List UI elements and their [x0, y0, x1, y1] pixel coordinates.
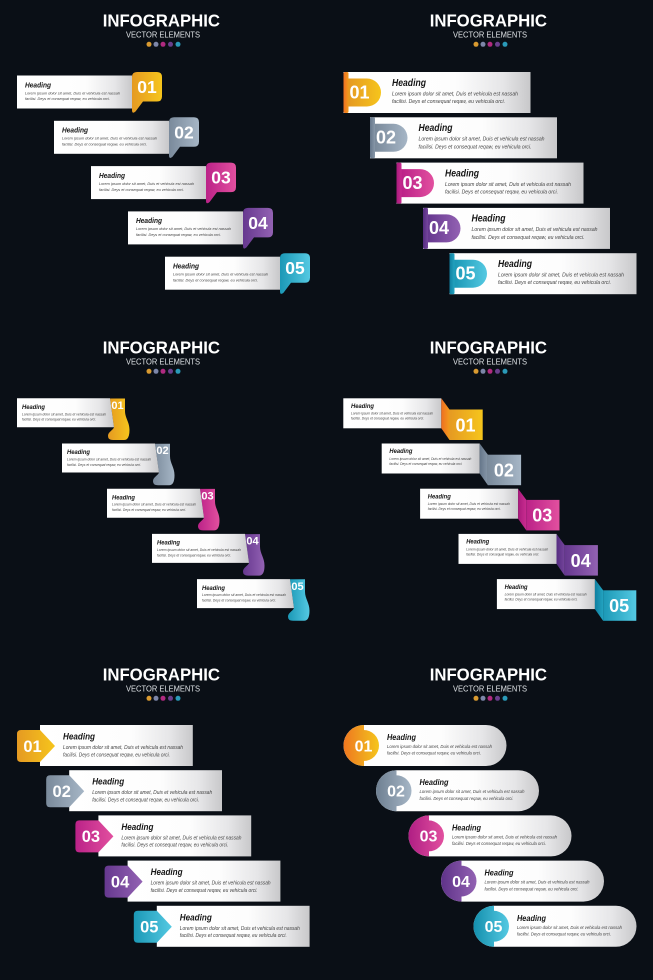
step 04	[128, 208, 273, 249]
step 02: facilisi. Deys et consequat reqaw, eu vehicula orci.	[389, 462, 462, 466]
step 01	[343, 398, 483, 440]
step 03: Heading	[121, 822, 154, 833]
step 02: facilisi. Deys et consequat reqaw, eu vehicula orci.	[420, 796, 514, 801]
panel: speech bubble steps	[17, 11, 310, 294]
step 05: facilisi. Deys et consequat reqaw, eu vehicula orci.	[180, 933, 287, 939]
step 01: facilisi. Deys et consequat reqaw, eu vehicula orci.	[351, 417, 424, 421]
step 04: Heading	[151, 867, 183, 878]
step 01: facilisi. Deys et consequat reqaw, eu vehicula orci.	[392, 99, 505, 105]
step 01: Lorem ipsum dolor sit amet, Duis et vehicula est nassah	[387, 744, 493, 749]
title block	[103, 665, 220, 701]
step 01: Heading	[351, 403, 375, 410]
step 03: Lorem ipsum dolor sit amet, Duis et vehicula est nassah	[445, 182, 571, 188]
step 02: 02	[53, 783, 71, 801]
title block	[430, 11, 547, 47]
step 04: 04	[429, 218, 449, 238]
step 02: 02	[156, 445, 169, 457]
step 02: Heading	[389, 448, 413, 455]
step 03	[75, 815, 251, 856]
step 02	[370, 117, 557, 158]
step 04: 04	[571, 551, 591, 571]
step 04: facilisi. Deys et consequat reqaw, eu vehicula orci.	[136, 232, 221, 237]
title block: INFOGRAPHIC	[430, 665, 547, 685]
step 05: Lorem ipsum dolor sit amet, Duis et vehicula est nassah	[505, 593, 587, 597]
step 03: Lorem ipsum dolor sit amet, Duis et vehicula est nassah	[99, 181, 194, 186]
step 01: Lorem ipsum dolor sit amet, Duis et vehicula est nassah	[63, 745, 183, 751]
step 04: Lorem ipsum dolor sit amet, Duis et vehicula est nassah	[151, 881, 271, 887]
step 02: Lorem ipsum dolor sit amet, Duis et vehicula est nassah	[62, 136, 157, 141]
step 03	[107, 489, 220, 530]
step 05: 05	[485, 919, 502, 936]
step 02	[62, 444, 174, 485]
step 04	[458, 534, 598, 576]
step 03	[408, 815, 572, 856]
title block	[103, 11, 220, 47]
step 03: facilisi. Deys et consequat reqaw, eu vehicula orci.	[452, 841, 546, 846]
step 01: 01	[23, 738, 42, 756]
step 01	[344, 72, 530, 113]
step 03: 03	[402, 173, 423, 193]
step 03: facilisi. Deys et consequat reqaw, eu vehicula orci.	[445, 190, 558, 196]
step 05: Lorem ipsum dolor sit amet, Duis et vehicula est nassah	[173, 272, 268, 276]
step 01	[344, 725, 506, 766]
step 03: facilisi. Deys et consequat reqaw, eu vehicula orci.	[112, 508, 186, 512]
step 04: Heading	[136, 216, 162, 225]
step 02: Heading	[418, 122, 453, 134]
title block: INFOGRAPHIC	[103, 338, 220, 358]
step 04	[441, 861, 604, 902]
step 03: Lorem ipsum dolor sit amet, Duis et vehicula est nassah	[121, 835, 242, 841]
step 05	[474, 906, 636, 947]
panel: folded square steps	[343, 338, 636, 621]
step 05: facilisi. Deys et consequat reqaw, eu vehicula orci.	[517, 932, 611, 937]
step 02	[382, 444, 521, 485]
step 02	[376, 770, 539, 811]
step 04	[152, 534, 264, 576]
step 04: 04	[248, 213, 268, 233]
step 04: facilisi. Deys et consequat reqaw, eu vehicula orci.	[466, 552, 539, 556]
step 04: facilisi. Deys et consequat reqaw, eu vehicula orci.	[151, 888, 258, 894]
title block: VECTOR ELEMENTS	[453, 683, 527, 693]
step 05: facilisi. Deys et consequat reqaw, eu vehicula orci.	[173, 277, 258, 282]
step 05: Heading	[180, 912, 212, 923]
step 04: Heading	[157, 540, 181, 547]
step 03: Heading	[112, 494, 136, 501]
title block: VECTOR ELEMENTS	[126, 29, 200, 39]
step 01: 01	[137, 77, 157, 97]
title block	[430, 665, 547, 701]
step 03	[91, 163, 236, 203]
title block: INFOGRAPHIC	[430, 11, 547, 31]
step 03: 03	[532, 506, 552, 526]
step 01: 01	[111, 400, 124, 412]
step 05	[134, 906, 310, 947]
step 01: 01	[355, 738, 372, 755]
step 01: facilisi. Deys et consequat reqaw, eu vehicula orci.	[25, 96, 110, 101]
step 03: facilisi. Deys et consequat reqaw, eu vehicula orci.	[428, 507, 501, 511]
step 04: Lorem ipsum dolor sit amet, Duis et vehicula est nassah	[466, 547, 548, 551]
step 02: Lorem ipsum dolor sit amet, Duis et vehicula est nassah	[418, 137, 545, 143]
step 05	[450, 253, 636, 294]
step 01: Heading	[387, 732, 417, 742]
step 05	[165, 253, 310, 294]
step 03: 03	[211, 168, 231, 188]
panel: tab steps	[344, 11, 636, 294]
step 01: Heading	[392, 77, 426, 89]
step 04: 04	[111, 873, 130, 891]
step 01	[17, 725, 193, 766]
step 05: Heading	[202, 585, 226, 592]
step 05: 05	[140, 919, 158, 937]
step 01	[17, 72, 162, 113]
step 03	[396, 163, 584, 204]
step 03: 03	[82, 828, 100, 846]
step 02: Lorem ipsum dolor sit amet, Duis et vehicula est nassah	[67, 457, 151, 461]
step 03: Heading	[452, 822, 482, 832]
step 04: Lorem ipsum dolor sit amet, Duis et vehicula est nassah	[484, 880, 590, 885]
step 04	[105, 861, 280, 902]
step 05: 05	[609, 596, 629, 616]
step 01: facilisi. Deys et consequat reqaw, eu vehicula orci.	[22, 418, 96, 422]
step 05	[497, 579, 636, 621]
step 02: Lorem ipsum dolor sit amet, Duis et vehicula est nassah	[389, 457, 471, 461]
title block: INFOGRAPHIC	[103, 665, 220, 685]
panel: ribbon steps	[17, 338, 310, 621]
step 02: Heading	[420, 777, 449, 787]
step 04: Heading	[466, 539, 490, 546]
title block: VECTOR ELEMENTS	[126, 683, 200, 693]
step 02: 02	[494, 460, 514, 480]
step 05: Heading	[173, 262, 199, 270]
step 03: Lorem ipsum dolor sit amet, Duis et vehicula est nassah	[428, 502, 510, 506]
panel: pill steps	[344, 665, 636, 947]
step 03: Lorem ipsum dolor sit amet, Duis et vehicula est nassah	[452, 834, 558, 839]
step 02: Heading	[92, 777, 124, 788]
step 05	[197, 579, 310, 621]
step 04: 04	[452, 874, 470, 891]
step 02: Lorem ipsum dolor sit amet, Duis et vehicula est nassah	[92, 790, 212, 796]
step 03: 03	[420, 829, 438, 846]
step 02: facilisi. Deys et consequat reqaw, eu vehicula orci.	[62, 141, 147, 146]
title block: VECTOR ELEMENTS	[453, 29, 527, 39]
step 05: Lorem ipsum dolor sit amet, Duis et vehicula est nassah	[202, 593, 286, 597]
step 04: Heading	[484, 868, 514, 878]
step 02: Heading	[62, 126, 88, 135]
title block	[103, 338, 220, 374]
step 04: Lorem ipsum dolor sit amet, Duis et vehicula est nassah	[136, 226, 231, 231]
step 03: facilisi. Deys et consequat reqaw, eu vehicula orci.	[99, 187, 184, 192]
step 05: facilisi. Deys et consequat reqaw, eu vehicula orci.	[505, 598, 578, 602]
step 04: facilisi. Deys et consequat reqaw, eu vehicula orci.	[472, 235, 584, 241]
step 05: 05	[455, 264, 476, 284]
step 01: facilisi. Deys et consequat reqaw, eu vehicula orci.	[387, 751, 481, 756]
title block: INFOGRAPHIC	[430, 338, 547, 358]
step 04: Lorem ipsum dolor sit amet, Duis et vehicula est nassah	[157, 548, 241, 552]
step 02: Lorem ipsum dolor sit amet, Duis et vehicula est nassah	[420, 789, 525, 794]
step 01: Heading	[63, 732, 95, 742]
title block: INFOGRAPHIC	[103, 11, 220, 31]
step 03: facilisi. Deys et consequat reqaw, eu vehicula orci.	[121, 843, 228, 849]
step 02	[46, 770, 222, 811]
step 05: Lorem ipsum dolor sit amet, Duis et vehicula est nassah	[517, 925, 623, 930]
panel: arrow tag steps	[17, 665, 310, 947]
step 05: facilisi. Deys et consequat reqaw, eu vehicula orci.	[498, 280, 611, 286]
step 05: Lorem ipsum dolor sit amet, Duis et vehicula est nassah	[498, 272, 624, 278]
title block: VECTOR ELEMENTS	[453, 356, 527, 366]
step 05: Heading	[505, 584, 528, 591]
step 01: facilisi. Deys et consequat reqaw, eu vehicula orci.	[63, 752, 170, 758]
step 01	[17, 398, 130, 440]
step 04	[423, 208, 610, 249]
step 03: Heading	[99, 171, 125, 180]
step 03: Lorem ipsum dolor sit amet, Duis et vehicula est nassah	[112, 503, 196, 507]
step 02: facilisi. Deys et consequat reqaw, eu vehicula orci.	[418, 144, 532, 150]
step 01: Lorem ipsum dolor sit amet, Duis et vehicula est nassah	[25, 90, 120, 95]
step 02: facilisi. Deys et consequat reqaw, eu vehicula orci.	[92, 797, 199, 803]
step 03: 03	[201, 490, 214, 502]
step 02: Heading	[67, 449, 91, 456]
step 04: 04	[246, 536, 259, 548]
step 02: 02	[387, 783, 405, 800]
step 03: Heading	[428, 493, 452, 500]
step 05: Heading	[517, 913, 547, 923]
step 04: facilisi. Deys et consequat reqaw, eu vehicula orci.	[484, 886, 578, 891]
step 04: facilisi. Deys et consequat reqaw, eu vehicula orci.	[157, 553, 231, 557]
step 01: 01	[349, 82, 370, 102]
step 05: Heading	[498, 258, 532, 270]
step 05: 05	[285, 258, 305, 278]
step 05: Lorem ipsum dolor sit amet, Duis et vehicula est nassah	[180, 926, 300, 932]
step 01: Lorem ipsum dolor sit amet, Duis et vehicula est nassah	[351, 412, 433, 416]
title block: VECTOR ELEMENTS	[126, 356, 200, 366]
step 01: Lorem ipsum dolor sit amet, Duis et vehicula est nassah	[392, 91, 518, 97]
step 01: Heading	[22, 404, 46, 411]
step 01: Heading	[25, 80, 51, 89]
step 02: facilisi. Deys et consequat reqaw, eu vehicula orci.	[67, 463, 141, 467]
step 04: Lorem ipsum dolor sit amet, Duis et vehicula est nassah	[472, 227, 598, 233]
step 02	[54, 117, 199, 158]
step 04: Heading	[472, 213, 506, 225]
title block	[430, 338, 547, 374]
step 03: Heading	[445, 167, 479, 179]
step 02: 02	[376, 128, 396, 148]
step 01: 01	[455, 415, 476, 435]
step 01: Lorem ipsum dolor sit amet, Duis et vehicula est nassah	[22, 412, 106, 416]
step 05: 05	[291, 581, 304, 593]
step 02: 02	[174, 122, 194, 142]
step 03	[420, 489, 560, 530]
step 05: facilisi. Deys et consequat reqaw, eu vehicula orci.	[202, 599, 276, 603]
